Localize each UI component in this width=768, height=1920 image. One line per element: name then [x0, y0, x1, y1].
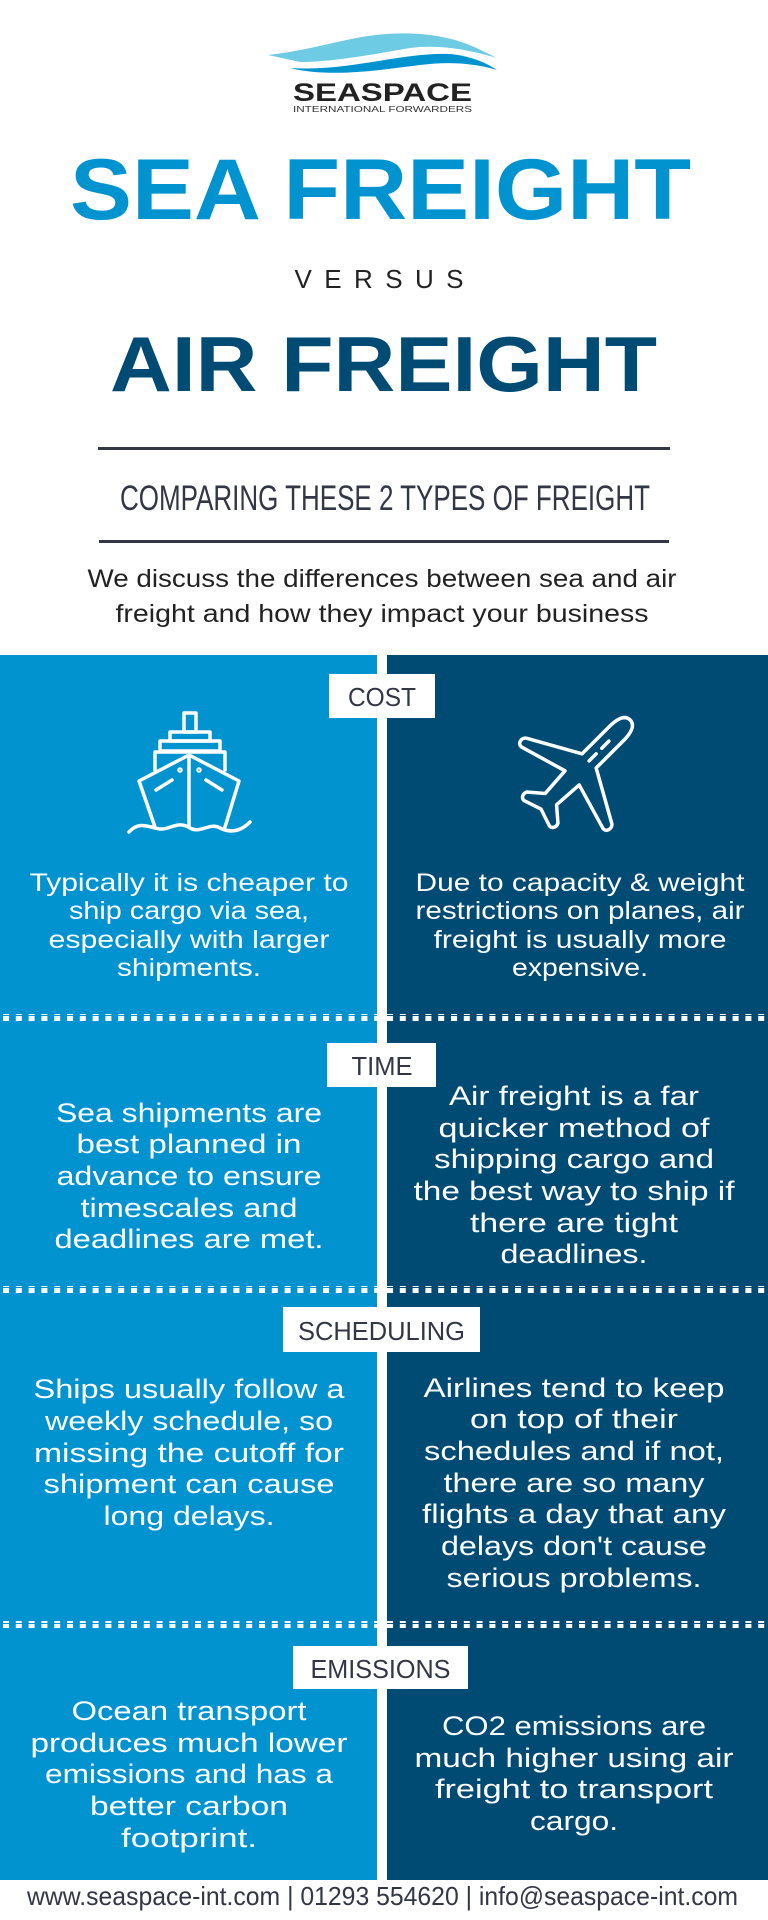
logo: SEASPACE	[293, 79, 472, 107]
text: scheduling air: Airlines tend to keep	[424, 1373, 724, 1403]
text: scheduling sea: missing the cutoff for	[34, 1438, 344, 1468]
label: cost	[329, 674, 435, 718]
intro text: We discuss the differences between sea and air	[88, 565, 676, 593]
text: cost air: freight is usually more	[434, 926, 726, 954]
text: emissions sea	[30, 1696, 348, 1853]
text: cost air: expensive.	[512, 954, 648, 982]
text: scheduling sea	[34, 1374, 346, 1531]
label: time	[327, 1043, 436, 1087]
text: time sea: deadlines are met.	[54, 1224, 324, 1254]
label: scheduling: SCHEDULING	[298, 1316, 465, 1346]
text: cost air: restrictions on planes, air	[416, 897, 744, 925]
text: emissions sea: emissions and has a	[45, 1759, 334, 1789]
label: emissions: EMISSIONS	[310, 1654, 450, 1684]
text: cost sea	[30, 869, 348, 982]
text: scheduling sea: Ships usually follow a	[34, 1374, 346, 1404]
text: cost air	[416, 869, 745, 982]
text: time air: deadlines.	[500, 1239, 648, 1269]
text: time air	[414, 1081, 735, 1269]
text: emissions air: much higher using air	[414, 1743, 734, 1773]
text: time air: quicker method of	[438, 1113, 710, 1143]
text: emissions sea: produces much lower	[30, 1728, 348, 1758]
text: scheduling sea: shipment can cause	[44, 1469, 334, 1499]
text: time sea	[54, 1098, 324, 1254]
text: time sea: timescales and	[80, 1193, 298, 1223]
label: cost: COST	[348, 682, 416, 712]
text: emissions air: freight to transport	[435, 1774, 714, 1804]
label: time: TIME	[352, 1051, 412, 1081]
text: cost air: Due to capacity & weight	[416, 869, 745, 897]
logo: INTERNATIONAL FORWARDERS	[293, 105, 472, 114]
text: emissions air: CO2 emissions are	[442, 1711, 706, 1741]
text: scheduling air	[422, 1373, 727, 1593]
text: time sea: Sea shipments are	[56, 1098, 322, 1128]
label: emissions	[293, 1646, 468, 1689]
logo	[268, 33, 497, 114]
text: cost sea: Typically it is cheaper to	[30, 869, 348, 897]
text: scheduling air: schedules and if not,	[424, 1436, 724, 1466]
text: emissions sea: footprint.	[121, 1823, 257, 1853]
icon: plane	[492, 676, 674, 858]
text: scheduling air: there are so many	[444, 1468, 705, 1498]
text: scheduling air: serious problems.	[446, 1563, 702, 1593]
footer contact: www.seaspace-int.com | 01293 554620 | info@seaspace-int.com	[26, 1881, 738, 1911]
label: scheduling	[283, 1307, 480, 1352]
text: scheduling sea: weekly schedule, so	[44, 1406, 333, 1436]
panel: sea (left)	[0, 655, 377, 1880]
text: cost sea: especially with larger	[48, 926, 330, 954]
title: sea freight: SEA FREIGHT	[70, 142, 691, 238]
text: time sea: advance to ensure	[56, 1161, 322, 1191]
text: emissions sea: Ocean transport	[72, 1696, 307, 1726]
text: emissions air	[414, 1711, 734, 1836]
text: time air: the best way to ship if	[414, 1176, 735, 1206]
intro text	[88, 565, 676, 628]
text: time air: Air freight is a far	[449, 1081, 699, 1111]
text: emissions sea: better carbon	[90, 1791, 288, 1821]
icon: ship	[129, 713, 250, 832]
text: time air: there are tight	[470, 1208, 679, 1238]
versus: VERSUS	[294, 264, 464, 294]
text: emissions air: cargo.	[530, 1806, 618, 1836]
text: time sea: best planned in	[76, 1129, 302, 1159]
text: cost sea: ship cargo via sea,	[69, 897, 309, 925]
intro text: freight and how they impact your business	[116, 600, 648, 628]
text: scheduling air: delays don't cause	[441, 1531, 707, 1561]
panel: air (right)	[387, 655, 768, 1880]
text: scheduling air: on top of their	[470, 1404, 678, 1434]
text: cost sea: shipments.	[117, 954, 261, 982]
text: time air: shipping cargo and	[434, 1144, 714, 1174]
text: scheduling sea: long delays.	[104, 1501, 274, 1531]
text: scheduling air: flights a day that any	[422, 1499, 727, 1529]
title: air freight: AIR FREIGHT	[110, 320, 657, 408]
